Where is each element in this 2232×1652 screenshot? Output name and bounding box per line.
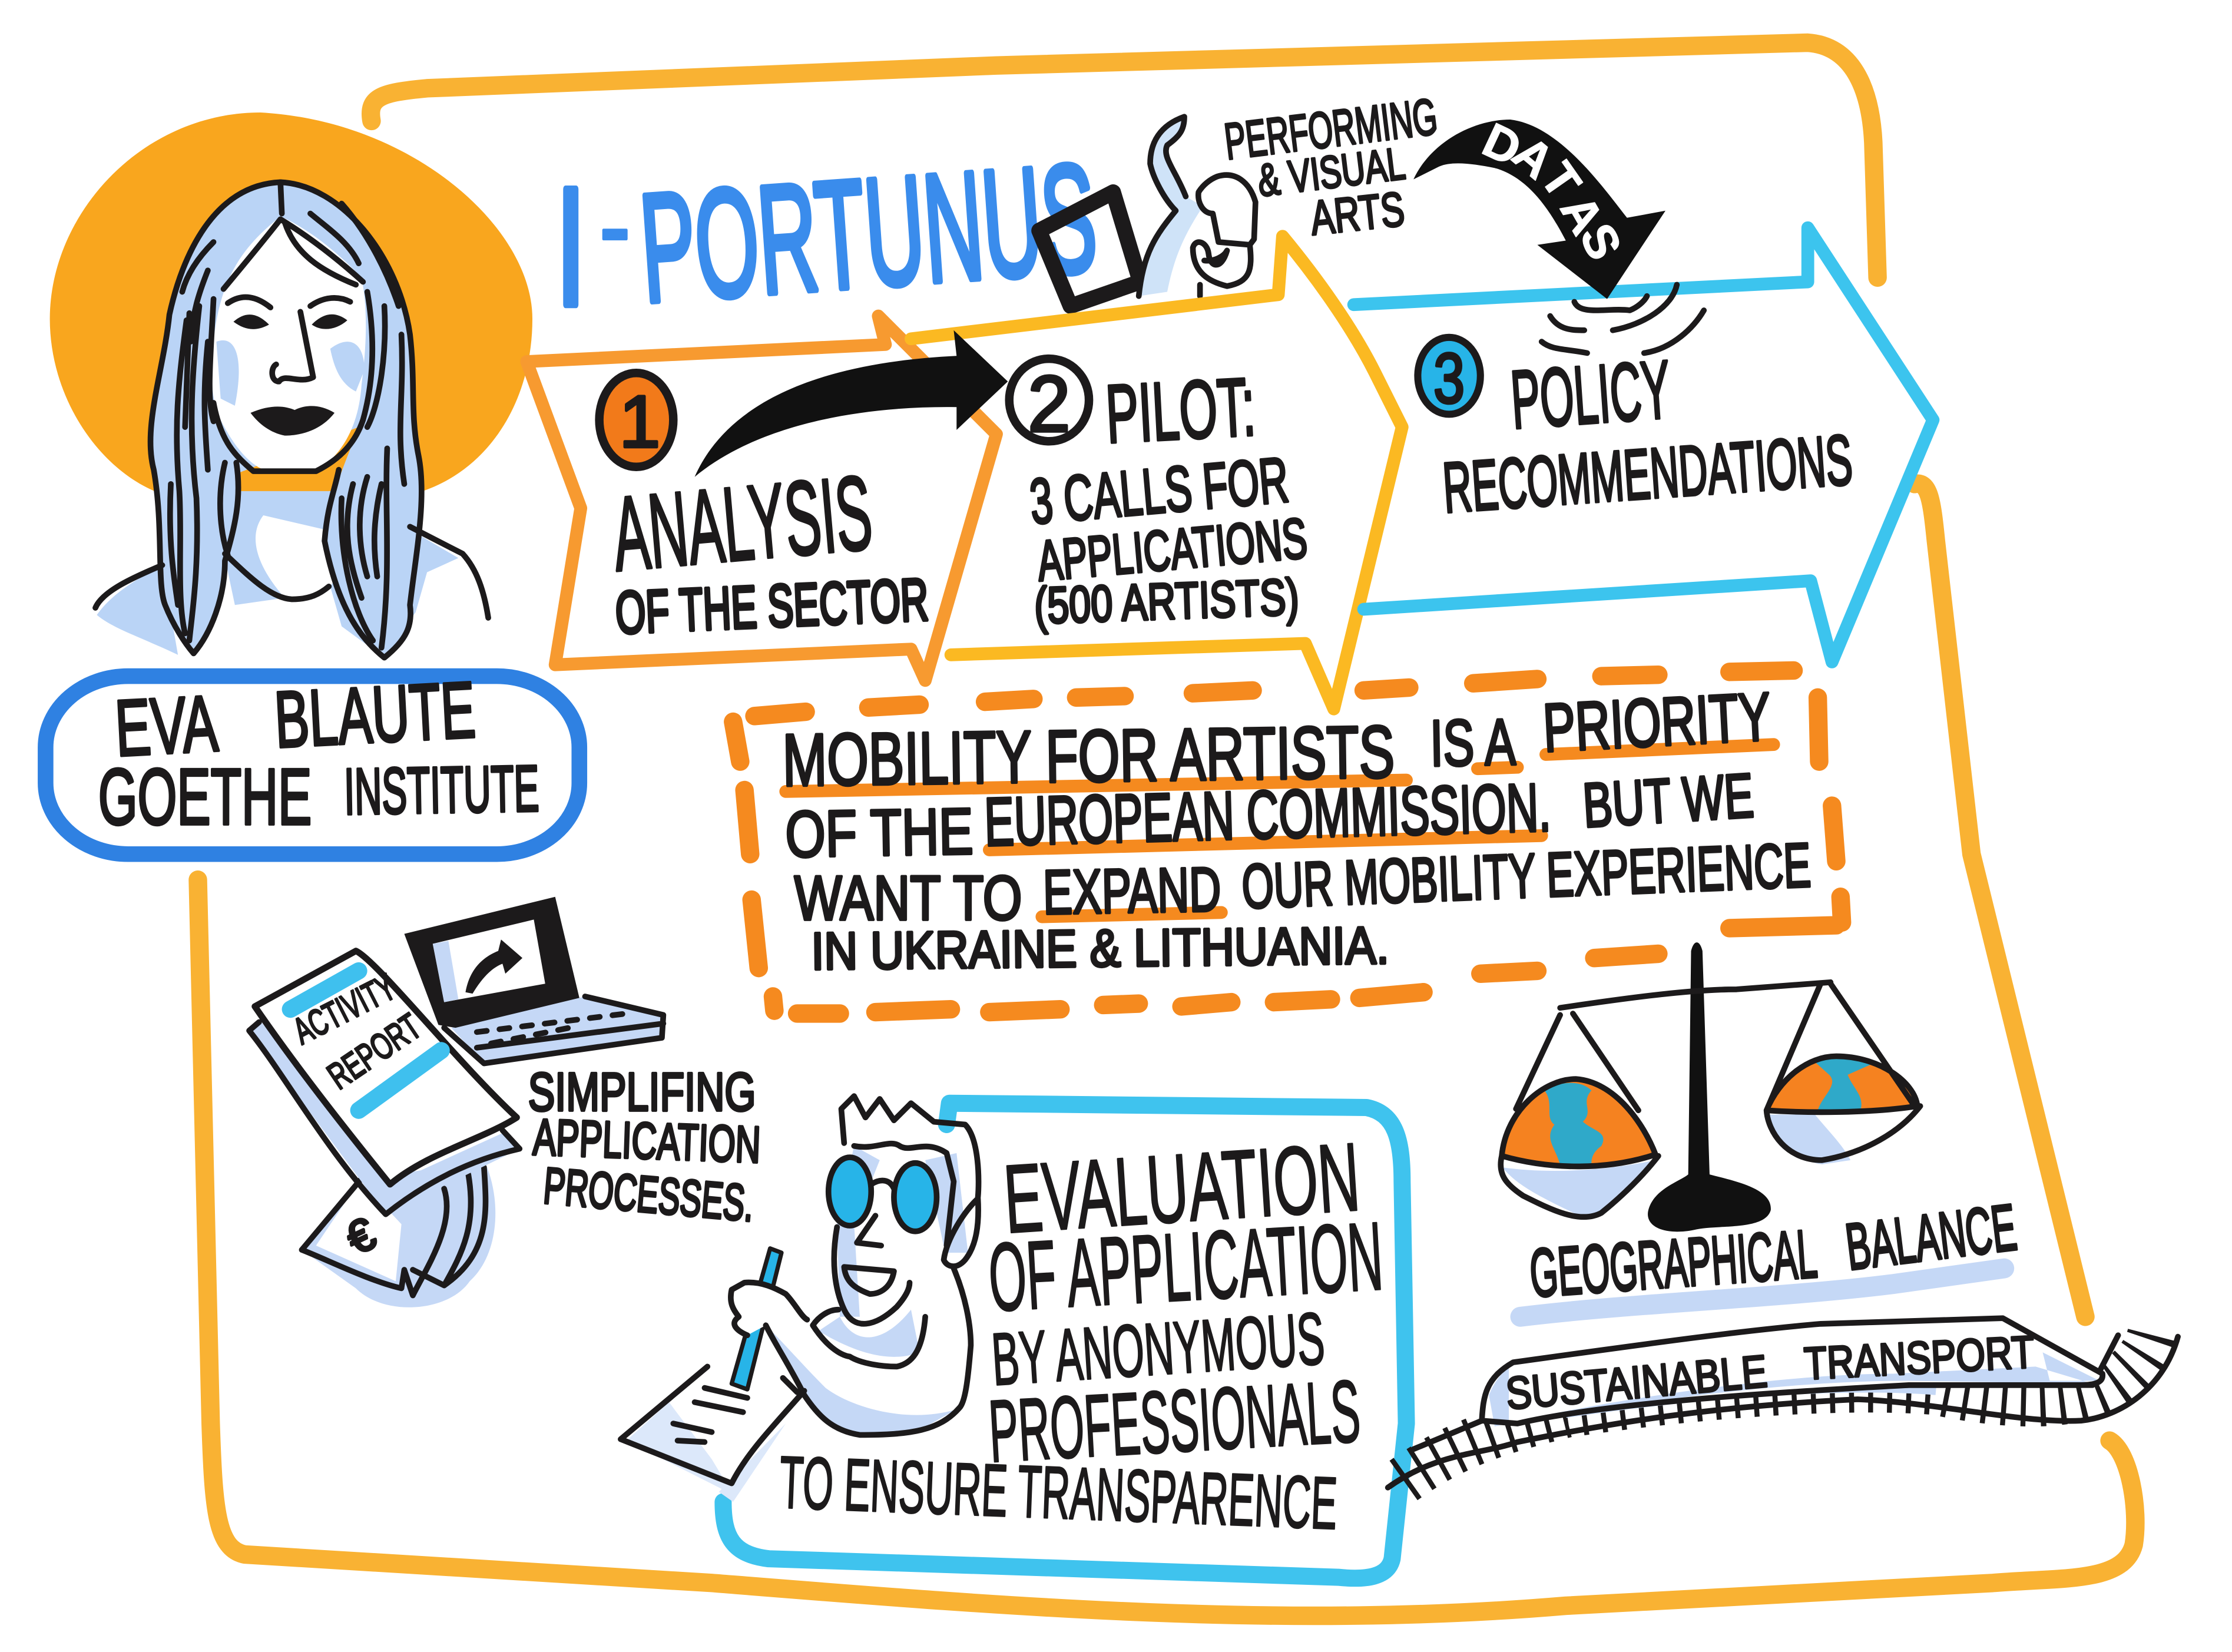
receipts — [316, 1180, 402, 1281]
datas label: A — [1550, 186, 1614, 243]
caption: performing and visual arts — [1221, 88, 1440, 246]
railway track ties — [1403, 1331, 2152, 1481]
face — [834, 1180, 910, 1324]
mobility statement dashed box — [733, 670, 1842, 1014]
caption: simplifying application processes: APPLICATION — [532, 1108, 761, 1174]
main title: PORTUNUS — [635, 132, 1101, 335]
caption: geographical balance: GEOGRAPHICAL — [1527, 1215, 1820, 1312]
evaluation panel: BY ANONYMOUS — [989, 1297, 1327, 1401]
mobility statement dashed box: IN UKRAINE & LITHUANIA. — [811, 916, 1389, 981]
icon: train on railway: TRANSPORT — [1803, 1327, 2036, 1389]
train body — [1482, 1318, 2102, 1423]
caption: simplifying application processes: PROCESSES. — [541, 1157, 756, 1233]
portrait: Eva Blaute — [50, 112, 532, 658]
institute text: GOETHE — [98, 751, 312, 841]
dancer leg — [1139, 117, 1203, 296]
caption: simplifying application processes: SIMPLIFING — [528, 1062, 756, 1122]
train label: SUSTAINABLE — [1504, 1346, 1769, 1419]
mobility statement dashed box: EUROPEAN COMMISSION. — [983, 769, 1552, 860]
main title: I — [555, 153, 587, 340]
name badge: INSTITUTE — [343, 751, 539, 829]
arrow step 3: policy — [1354, 228, 1933, 662]
datas label: S — [1569, 216, 1631, 268]
evaluation text: EVALUATION — [1001, 1122, 1363, 1253]
body wash — [97, 491, 458, 658]
icon: laptop and activity report: REPORT — [320, 1006, 428, 1097]
dancer body — [1193, 175, 1256, 296]
datas label — [1475, 113, 1631, 268]
evaluation panel — [621, 1096, 1406, 1578]
icon: scales with globes — [1501, 942, 1920, 1231]
report back cover — [249, 1019, 519, 1214]
step 1 badge — [600, 373, 673, 467]
icon: performing arts figure and frame — [1039, 117, 1256, 306]
caption: performing and visual arts: & VISUAL — [1255, 138, 1408, 206]
datas arrow — [1413, 113, 1704, 353]
main title — [555, 132, 1101, 340]
payment receipts wash — [302, 1160, 495, 1307]
pen — [731, 1249, 781, 1389]
datas label: D — [1475, 113, 1529, 176]
statement text: MOBILITY FOR ARTISTS — [782, 710, 1395, 802]
left pan — [1501, 1014, 1658, 1217]
icon: train on railway — [1388, 1318, 2178, 1488]
underline wash: geographical balance — [1520, 1269, 2004, 1317]
screen arrow — [465, 939, 522, 994]
glasses — [829, 1157, 871, 1226]
evaluation panel: TO ENSURE TRANSPARENCE — [778, 1441, 1339, 1545]
scale post — [1648, 942, 1771, 1231]
mobility statement dashed box: IS A — [1429, 705, 1516, 780]
evaluation panel: PROFESSIONALS — [986, 1361, 1363, 1481]
highlight underlines — [786, 744, 1774, 917]
ripples — [1542, 284, 1704, 353]
step 2 text: 3 CALLS FOR — [1027, 445, 1291, 538]
main title: - — [600, 162, 631, 289]
hand — [731, 1282, 807, 1335]
step 1 text: OF THE SECTOR — [614, 565, 930, 647]
step 3 badge — [1418, 337, 1481, 418]
report title: ACTIVITY — [287, 966, 402, 1052]
step 3 text: RECOMMENDATIONS — [1440, 420, 1855, 528]
name text: EVA — [113, 678, 220, 773]
arrow step 1: analysis — [526, 316, 996, 680]
step 2 badge: 2 — [1028, 359, 1071, 448]
report page — [255, 951, 516, 1184]
arrow step 2: pilot — [911, 236, 1402, 709]
name badge — [45, 664, 579, 854]
railway rails — [1388, 1335, 2178, 1488]
mobility statement dashed box: OUR MOBILITY EXPERIENCE — [1240, 830, 1812, 922]
keyboard — [451, 997, 663, 1064]
step 3 badge: 3 — [1433, 339, 1465, 418]
figure wash — [766, 1146, 968, 1438]
scale beam — [1560, 982, 1830, 1008]
mobility statement dashed box: PRIORITY — [1541, 678, 1773, 766]
datas label: T — [1530, 153, 1591, 208]
caption: simplifying application processes — [528, 1062, 761, 1233]
step 3 text — [1440, 343, 1855, 528]
step 2 text: PILOT: — [1104, 360, 1258, 461]
hair outlines and strands — [150, 182, 280, 653]
face — [212, 216, 366, 471]
step 2 text: (500 ARTISTS) — [1034, 568, 1300, 635]
step 1 badge: 1 — [619, 380, 660, 463]
paper — [621, 1366, 804, 1484]
step 1 text — [608, 453, 930, 647]
right pan — [1767, 984, 1920, 1164]
caption: performing and visual arts: PERFORMING — [1221, 88, 1440, 171]
cheek wash — [216, 340, 365, 406]
black frame — [1039, 192, 1140, 306]
black arrow from step 1 to step 2 — [695, 330, 1008, 477]
mobility statement dashed box: BUT WE — [1581, 760, 1756, 840]
shoulders — [95, 527, 488, 618]
datas label: A — [1503, 126, 1564, 190]
step 2 text — [1027, 360, 1310, 635]
hair — [842, 1096, 979, 1246]
orange halo behind head — [50, 112, 532, 492]
report highlights — [290, 971, 441, 1110]
eyes, brows, nose, mouth — [228, 297, 350, 307]
railway inner clear — [1566, 1388, 1936, 1413]
icon: laptop and activity report — [249, 897, 663, 1307]
hair fill — [150, 182, 422, 658]
name badge: BLAUTE — [272, 664, 478, 764]
laptop screen — [404, 897, 579, 1028]
caption: geographical balance: BALANCE — [1842, 1190, 2021, 1284]
step 3 text: POLICY — [1508, 343, 1674, 446]
step 1 text: ANALYSIS — [608, 453, 876, 593]
euro sign: € — [339, 1208, 383, 1264]
step 2 badge — [1009, 359, 1089, 448]
mobility statement dashed box: OF THE — [784, 794, 974, 871]
caption: performing and visual arts: ARTS — [1308, 183, 1407, 246]
mobility statement dashed box: EXPAND — [1042, 854, 1221, 928]
mobility statement dashed box: WANT TO — [794, 863, 1022, 933]
evaluation panel: OF APPLICATION — [986, 1201, 1386, 1332]
body and arm — [731, 1269, 971, 1435]
icon: evaluator figure — [621, 1096, 979, 1502]
step 2 text: APPLICATIONS — [1035, 506, 1310, 593]
ear — [944, 1199, 978, 1266]
